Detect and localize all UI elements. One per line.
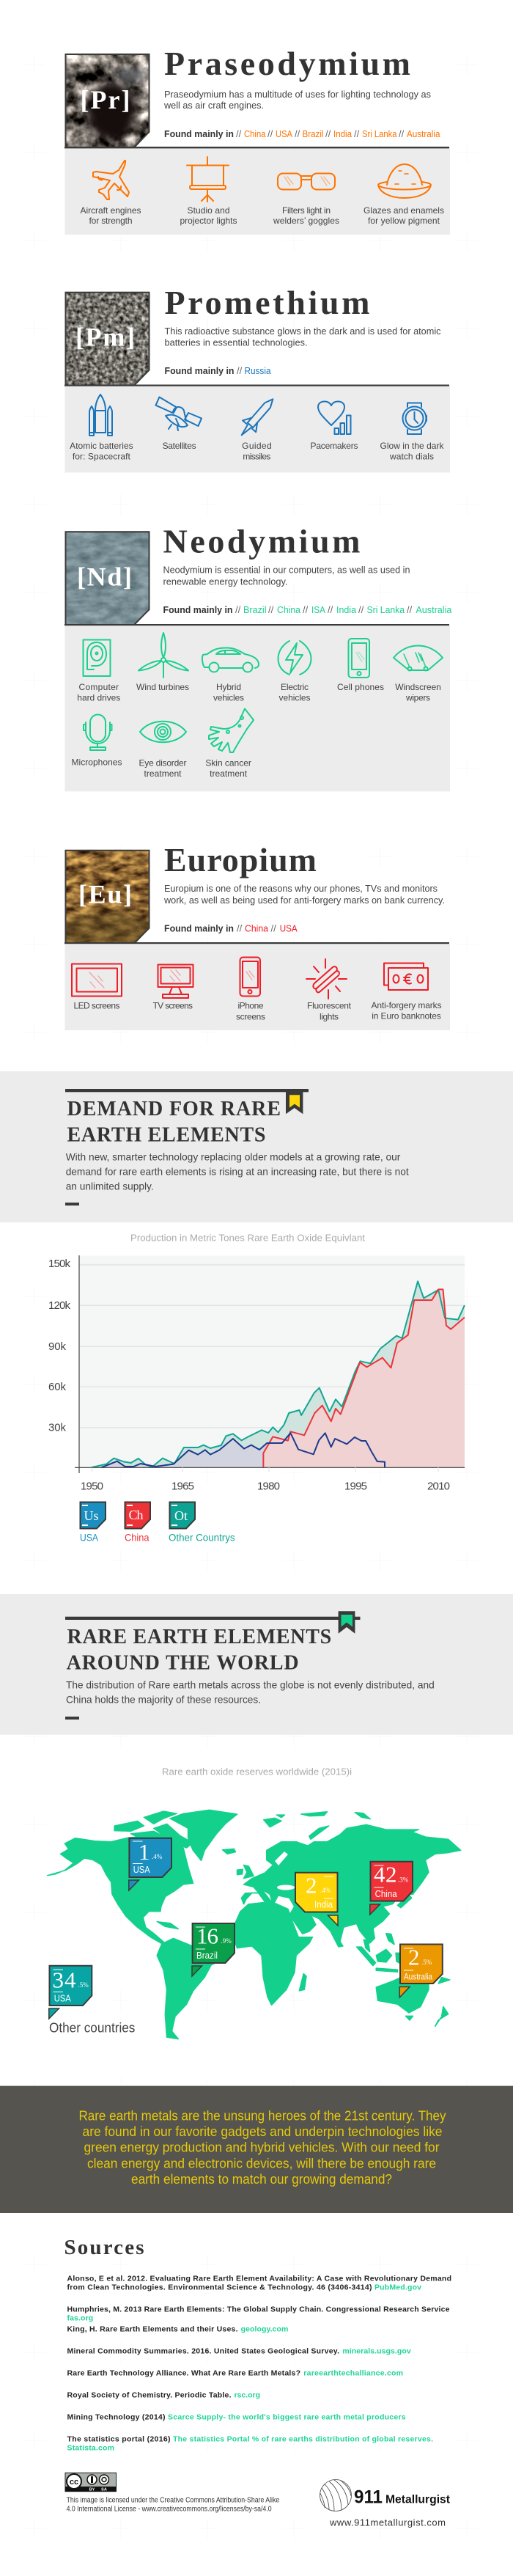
- label: skin cancer: [205, 757, 251, 779]
- header bar and bookmark: [65, 1089, 309, 1114]
- legend: China: [125, 1502, 150, 1544]
- callout: Brazil 16.9%: Brazil: [196, 1950, 218, 1961]
- label: skin cancer: treatment: [210, 768, 248, 779]
- callout: USA 1.4%: .4%: [152, 1853, 163, 1860]
- label: LED screens: LED screens: [73, 1001, 120, 1011]
- label: goggles: welders’ goggles: [273, 216, 339, 226]
- line: China: [263, 1289, 465, 1467]
- label: wind turbines: Wind turbines: [136, 682, 189, 692]
- label: fluorescent: [307, 1001, 352, 1021]
- label: eye disorder: treatment: [144, 768, 182, 779]
- label: wipers: wipers: [405, 692, 430, 702]
- area series: [91, 1281, 465, 1467]
- callout: Australia 2.5%: 2: [408, 1944, 419, 1970]
- panel: Promethium uses: [64, 386, 450, 472]
- reference list: Alonso, E et al. 2012. Evaluating Rare Earth Element Availability: A Case with Revolutionary Demand: [67, 2274, 451, 2283]
- mineral tile: Pr: [Pr]: [81, 85, 130, 114]
- label: watch: Glow in the dark: [380, 441, 444, 451]
- icon: windscreen wipers: [394, 645, 443, 670]
- mineral tile: Eu: [64, 849, 150, 942]
- x axis labels: 1980: [257, 1480, 280, 1493]
- label: electric vehicles: Electric: [281, 682, 309, 692]
- description: [163, 883, 445, 906]
- reference list: The statistics Portal % of rare earths distribution of global reserves.: [173, 2434, 433, 2443]
- conclusion text: green energy production and hybrid vehicles. With our need for: [84, 2140, 440, 2155]
- label: iPhone screens: [236, 1001, 265, 1021]
- found mainly in: //: [303, 604, 309, 615]
- logo: 911 Metallurgist: www.911metallurgist.com: [329, 2517, 446, 2528]
- icon: aircraft: [93, 161, 129, 199]
- callout: China 42.3%: 42: [374, 1862, 397, 1887]
- description: [163, 565, 410, 587]
- icon: skin hand: [209, 708, 254, 752]
- found mainly in: //: [399, 128, 405, 139]
- label: hard drives: Computer: [79, 682, 119, 692]
- found mainly in: Found mainly in: [164, 922, 234, 933]
- conclusion text: earth elements to match our growing demand?: [131, 2172, 392, 2187]
- reference list: rareearthtechalliance.com: [303, 2368, 403, 2377]
- reference list: Mining Technology (2014): [67, 2412, 166, 2421]
- reference list: PubMed.gov: [374, 2283, 421, 2291]
- label: fluorescent: lights: [320, 1011, 339, 1021]
- heading: DEMAND FOR RARE: [67, 1098, 281, 1120]
- reference list: Statista.com: [67, 2443, 114, 2452]
- creative commons badge: [65, 2473, 116, 2492]
- found mainly in: China: [277, 604, 301, 615]
- icon: spacecraft: [89, 395, 112, 436]
- found mainly in: USA: [280, 922, 298, 933]
- found mainly in: India: [333, 128, 353, 139]
- line: USA: [101, 1433, 385, 1467]
- label: wipers: [395, 682, 441, 702]
- found mainly in: USA: [276, 128, 292, 139]
- label: hybrid vehicles: Hybrid: [216, 682, 241, 692]
- label: glazes: [363, 205, 444, 226]
- sources: [64, 2236, 451, 2452]
- found mainly in: //: [358, 604, 364, 615]
- label: fluorescent: Fluorescent: [307, 1001, 352, 1011]
- y axis labels: 30k: [48, 1422, 66, 1434]
- found mainly in: Australia: [416, 604, 452, 615]
- callout: Australia 2.5%: [399, 1944, 443, 1997]
- label: watch: [380, 441, 444, 462]
- icon: LED screen: [72, 964, 122, 996]
- panel: Europium uses: [64, 944, 450, 1030]
- label: cell phones: Cell phones: [337, 682, 384, 692]
- y axis labels: 120k: [48, 1299, 70, 1312]
- label: electric vehicles: [278, 682, 311, 702]
- icon: pacemaker: [318, 402, 350, 434]
- y axis labels: 150k: [48, 1258, 70, 1270]
- callout: India 2.4%: India: [314, 1899, 333, 1910]
- creative commons badge: SA: [101, 2488, 107, 2492]
- description: [164, 326, 441, 348]
- callout: Brazil 16.9%: [192, 1923, 235, 1976]
- logo sphere: [320, 2480, 352, 2511]
- icon: electric lightning: [278, 641, 311, 675]
- label: anti-forgery: [371, 1000, 441, 1021]
- found mainly in: Sri Lanka: [366, 604, 405, 615]
- callout: other countries 34.5%: [49, 1966, 135, 2036]
- heading: [67, 1098, 281, 1146]
- found mainly in: [163, 604, 452, 615]
- found mainly in: //: [325, 128, 331, 139]
- found mainly in: //: [271, 922, 276, 933]
- mineral tile: Nd: [Nd]: [77, 562, 132, 591]
- header bar and bookmark: [65, 1611, 361, 1634]
- chart: production in metric tones: [48, 1233, 465, 1544]
- chart title: Production in Metric Tones Rare Earth Oxide Equivlant: [130, 1233, 365, 1244]
- reference list: Rare Earth Technology Alliance. What Are Rare Earth Metals?: [67, 2368, 300, 2377]
- license text: 4.0 International License - www.creativecommons.org/licenses/by-sa/4.0: [67, 2506, 272, 2514]
- legend: other countries: [169, 1502, 235, 1544]
- found mainly in: Sri Lanka: [362, 128, 397, 139]
- description: [66, 1151, 409, 1192]
- icon: fluorescent lights: [306, 959, 347, 999]
- label: anti-forgery: in Euro banknotes: [372, 1010, 441, 1021]
- found mainly in: //: [354, 128, 360, 139]
- reference list: fas.org: [67, 2313, 93, 2322]
- found mainly in: //: [267, 128, 273, 139]
- icon: iPhone: [240, 958, 260, 996]
- found mainly in: Brazil: [302, 128, 324, 139]
- label: TV screens: TV screens: [152, 1001, 193, 1011]
- creative commons badge: cc: [70, 2478, 78, 2487]
- label: iPhone screens: screens: [236, 1011, 265, 1021]
- legend: USA: [80, 1502, 106, 1544]
- icon: watch: [403, 403, 427, 434]
- found mainly in: [164, 128, 440, 139]
- logo: 911 Metallurgist: [320, 2480, 451, 2528]
- label: electric vehicles: vehicles: [278, 692, 311, 702]
- label: anti-forgery: Anti-forgery marks: [371, 1000, 441, 1010]
- icon: glaze bowl: [378, 164, 431, 198]
- reference list: Royal Society of Chemistry. Periodic Table.: [67, 2390, 232, 2399]
- label: watch: watch dials: [389, 452, 434, 462]
- heading: [67, 1626, 331, 1674]
- panel: conclusion: [0, 2085, 513, 2213]
- callout: China 42.3%: .3%: [398, 1876, 409, 1883]
- mineral tile: Pr: [64, 54, 150, 147]
- mineral tile: Eu: [Eu]: [78, 880, 132, 909]
- callout: Brazil 16.9%: 16: [196, 1923, 218, 1949]
- reference list: geology.com: [241, 2324, 288, 2333]
- callout: USA 1.4%: 1: [139, 1839, 150, 1865]
- found mainly in: //: [237, 922, 243, 933]
- label: aircraft: Aircraft engines: [81, 205, 141, 216]
- callout: other countries 34.5%: 34: [53, 1967, 76, 1993]
- label: projector: projector lights: [180, 216, 237, 226]
- label: spacecraft: Atomic batteries: [70, 441, 133, 451]
- description: [163, 89, 431, 111]
- mineral tile: Pm: [64, 292, 150, 386]
- conclusion text: are found in our favorite gadgets and underpin technologies like: [82, 2124, 443, 2139]
- found mainly in: //: [237, 365, 243, 376]
- callout: India 2.4%: [295, 1873, 338, 1926]
- panel: demand for rare earth elements: [0, 1071, 513, 1222]
- map white seas: [275, 1852, 295, 1890]
- icon: euro banknotes: [384, 964, 428, 990]
- label: glazes: Glazes and enamels: [363, 205, 444, 216]
- description: Praseodymium has a multitude of uses for lighting technology as: [164, 89, 431, 100]
- license text: This image is licensed under the Creative Commons Attribution-Share Alike: [67, 2497, 280, 2505]
- section: Praseodymium: [64, 45, 450, 235]
- callout: Australia 2.5%: .5%: [421, 1959, 432, 1966]
- description: With new, smarter technology replacing older models at a growing rate, our: [66, 1151, 401, 1163]
- label: hard drives: [77, 682, 120, 702]
- title: Neodymium: [163, 522, 361, 560]
- legend: China: China: [125, 1532, 150, 1544]
- found mainly in: [164, 922, 298, 933]
- icon: TV screen: [158, 965, 193, 998]
- reference list: Humphries, M. 2013 Rare Earth Elements: The Global Supply Chain. Congressional Research Service: [67, 2305, 450, 2313]
- section: Europium: [57, 841, 450, 1030]
- x axis labels: 1965: [171, 1480, 194, 1493]
- icon: microphone: [84, 714, 111, 750]
- reference list: King, H. Rare Earth Elements and their Uses.: [67, 2324, 238, 2333]
- description: an unlimited supply.: [66, 1181, 154, 1192]
- sources heading: Sources: [64, 2236, 144, 2259]
- heading: RARE EARTH ELEMENTS: [67, 1626, 331, 1648]
- logo: 911 Metallurgist: 911: [354, 2487, 383, 2507]
- title: Promethium: [164, 284, 369, 321]
- description: renewable energy technology.: [163, 576, 287, 587]
- conclusion text: [79, 2109, 446, 2187]
- callout: Australia 2.5%: Australia: [404, 1971, 432, 1981]
- line: other countries: [91, 1281, 465, 1467]
- panel: Neodymium uses: [64, 625, 450, 791]
- logo: 911 Metallurgist: Metallurgist: [385, 2493, 451, 2506]
- legend: USA: USA: [80, 1532, 99, 1544]
- conclusion text: Rare earth metals are the unsung heroes of the 21st century. They: [79, 2109, 446, 2124]
- world map: [48, 1810, 461, 2039]
- found mainly in: Found mainly in: [164, 365, 235, 376]
- title: Europium: [164, 841, 317, 878]
- legend: other countries: Other Countrys: [169, 1532, 235, 1544]
- y axis labels: 60k: [48, 1381, 66, 1393]
- found mainly in: China: [245, 922, 269, 933]
- x axis labels: 1995: [344, 1480, 367, 1493]
- found mainly in: ISA: [311, 604, 325, 615]
- callout: other countries 34.5%: USA: [54, 1992, 71, 2003]
- description: The distribution of Rare earth metals across the globe is not evenly distributed, and: [66, 1679, 435, 1691]
- callout: India 2.4%: .4%: [320, 1887, 331, 1894]
- found mainly in: Found mainly in: [164, 128, 234, 139]
- label: hard drives: hard drives: [77, 692, 120, 702]
- label: hybrid vehicles: vehicles: [213, 692, 244, 702]
- creative commons badge: BY: [89, 2488, 95, 2492]
- found mainly in: //: [407, 604, 413, 615]
- mineral tile: Nd: [64, 531, 150, 625]
- label: missiles: [242, 441, 272, 462]
- x axis labels: [81, 1480, 450, 1493]
- title: Praseodymium: [164, 45, 410, 82]
- label: projector: [180, 205, 237, 226]
- icon: hard drive: [84, 639, 110, 676]
- found mainly in: Found mainly in: [163, 604, 233, 615]
- found mainly in: Brazil: [243, 604, 267, 615]
- label: spacecraft: [70, 441, 133, 462]
- label: goggles: [273, 205, 339, 226]
- description: well as air craft engines.: [163, 100, 264, 111]
- found mainly in: //: [235, 604, 241, 615]
- found mainly in: India: [336, 604, 357, 615]
- panel: Praseodymium uses: [64, 147, 450, 235]
- map section: [48, 1766, 461, 2039]
- found mainly in: //: [295, 128, 300, 139]
- label: aircraft: for strength: [89, 216, 132, 226]
- label: spacecraft: for: Spacecraft: [73, 452, 131, 462]
- label: satellites: Satellites: [163, 441, 196, 451]
- callout: other countries 34.5%: .5%: [78, 1981, 89, 1989]
- description: batteries in essential technologies.: [164, 337, 308, 348]
- label: wipers: Windscreen: [395, 682, 441, 692]
- section: Promethium: [64, 284, 450, 472]
- label: eye disorder: Eye disorder: [139, 757, 186, 768]
- reference list: from Clean Technologies. Environmental Science & Technology. 46 (3406-3414): [67, 2283, 372, 2291]
- label: eye disorder: [139, 757, 186, 779]
- found mainly in: //: [328, 604, 333, 615]
- legend: China: Ch: [129, 1508, 144, 1522]
- found mainly in: //: [268, 604, 274, 615]
- y axis labels: [48, 1258, 70, 1434]
- description: work, as well as being used for anti-forgery marks on bank currency.: [163, 895, 445, 906]
- callout: USA 1.4%: [129, 1838, 171, 1890]
- icon: wind turbine: [138, 633, 189, 678]
- description: China holds the majority of these resources.: [66, 1694, 261, 1706]
- icon: satellite: [155, 397, 202, 430]
- found mainly in: [164, 365, 271, 376]
- callout: China 42.3%: China: [375, 1888, 397, 1899]
- reference list: rsc.org: [235, 2390, 260, 2399]
- description: This radioactive substance glows in the dark and is used for atomic: [164, 326, 441, 337]
- label: skin cancer: Skin cancer: [205, 757, 251, 768]
- conclusion text: clean energy and electronic devices, will there be enough rare: [87, 2156, 436, 2170]
- callout: USA 1.4%: USA: [133, 1864, 150, 1875]
- legend: USA: Us: [84, 1508, 98, 1523]
- legend: other countries: Ot: [174, 1508, 188, 1523]
- map title: Rare earth oxide reserves worldwide (2015)i: [162, 1766, 352, 1777]
- label: microphones: Microphones: [72, 757, 122, 767]
- icon: hybrid car: [202, 648, 259, 672]
- label: goggles: Filters light in: [282, 205, 331, 216]
- icon: eye: [140, 722, 186, 742]
- section: Neodymium: [64, 522, 452, 791]
- reference list: minerals.usgs.gov: [342, 2346, 411, 2355]
- description: Neodymium is essential in our computers, as well as used in: [163, 565, 410, 576]
- found mainly in: Russia: [245, 365, 271, 376]
- reference list: Scarce Supply- the world's biggest rare earth metal producers: [168, 2412, 406, 2421]
- label: iPhone screens: iPhone: [237, 1001, 264, 1011]
- found mainly in: //: [236, 128, 242, 139]
- label: hybrid vehicles: [213, 682, 244, 702]
- icon: goggles: [278, 173, 335, 189]
- icon: missile: [235, 393, 279, 441]
- label: pacemakers: Pacemakers: [311, 441, 358, 451]
- panel: rare earth elements around the world: [0, 1594, 513, 1735]
- label: aircraft: [81, 205, 141, 226]
- label: missiles: missiles: [243, 452, 270, 462]
- description: [66, 1679, 435, 1706]
- label: projector: Studio and: [188, 205, 230, 216]
- label: glazes: for yellow pigment: [368, 216, 440, 226]
- found mainly in: Australia: [407, 128, 440, 139]
- icon: projector screen: [187, 157, 229, 202]
- callout: India 2.4%: 2: [306, 1873, 317, 1898]
- callout: Brazil 16.9%: .9%: [221, 1937, 232, 1945]
- y axis labels: 90k: [48, 1340, 66, 1353]
- heading: EARTH ELEMENTS: [67, 1123, 265, 1146]
- description: Europium is one of the reasons why our phones, TVs and monitors: [164, 883, 438, 894]
- heading: AROUND THE WORLD: [67, 1651, 299, 1674]
- label: missiles: Guided: [242, 441, 272, 451]
- found mainly in: China: [244, 128, 266, 139]
- icon: cell phone: [349, 639, 369, 678]
- reference list: The statistics portal (2016): [67, 2434, 170, 2443]
- x axis labels: 2010: [427, 1480, 450, 1493]
- callout: China 42.3%: [370, 1862, 413, 1915]
- reference list: Mineral Commodity Summaries. 2016. United States Geological Survey.: [67, 2346, 339, 2355]
- reference list: [67, 2274, 451, 2452]
- license text: [67, 2497, 280, 2514]
- mineral tile: Pm: [Pm]: [75, 323, 135, 352]
- description: demand for rare earth elements is rising at an increasing rate, but there is not: [66, 1166, 409, 1178]
- callout: other countries 34.5%: Other countries: [49, 2021, 135, 2036]
- x axis labels: 1950: [81, 1480, 103, 1493]
